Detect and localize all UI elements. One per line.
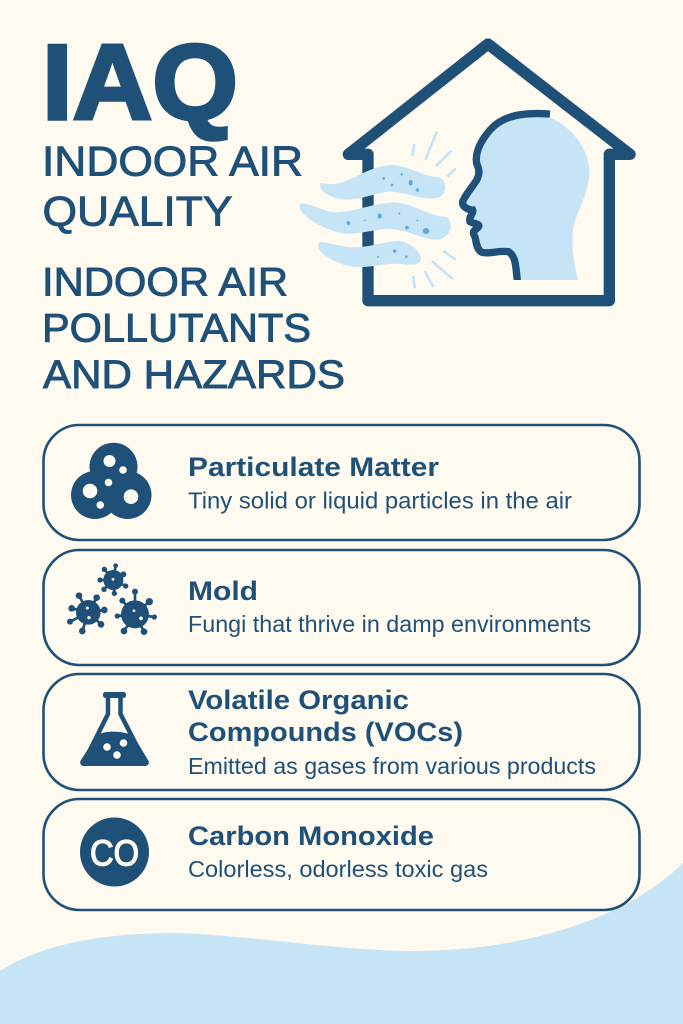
icon: particles [71, 443, 152, 519]
card: particulate matter [44, 425, 640, 540]
heading: indoor air pollutants and hazards: POLLUTANTS [42, 307, 311, 351]
background wave [0, 863, 683, 1024]
house outline [348, 44, 630, 301]
polluted air streams [299, 165, 451, 267]
head fill [465, 115, 589, 280]
heading: indoor air pollutants and hazards: INDOOR AIR [42, 261, 288, 305]
heading: indoor air pollutants and hazards [42, 261, 345, 397]
card: particulate matter: Tiny solid or liquid particles in the air [188, 487, 572, 513]
head profile line [463, 114, 550, 287]
text: volatile organic compounds: Volatile Organic [188, 685, 409, 715]
card: volatile organic compounds: Emitted as gases from various products [188, 753, 596, 779]
icon: mold spores [67, 563, 157, 635]
air rays [412, 131, 456, 288]
text: particulate matter: Particulate Matter [188, 452, 439, 482]
heading: indoor air pollutants and hazards: AND HAZARDS [43, 353, 345, 397]
heading: indoor air quality: INDOOR AIR [42, 138, 303, 185]
icon: CO badge: CO [90, 832, 139, 874]
card: mold: Fungi that thrive in damp environments [188, 611, 591, 637]
card: mold [44, 550, 640, 665]
card: carbon monoxide: Colorless, odorless toxic gas [188, 856, 488, 882]
card: volatile organic compounds: Compounds (VOCs) [188, 717, 463, 747]
pollutant specks [346, 173, 429, 258]
heading: indoor air quality [42, 138, 303, 235]
card: volatile organic compounds [44, 674, 640, 790]
text: carbon monoxide: Carbon Monoxide [188, 821, 434, 851]
card: carbon monoxide [44, 799, 640, 910]
illustration: house with head and polluted air [299, 44, 630, 301]
icon: flask [80, 692, 149, 766]
heading: indoor air quality: QUALITY [42, 188, 232, 235]
title: IAQ: IAQ [42, 22, 238, 142]
text: mold: Mold [188, 576, 258, 606]
icon: CO badge [80, 818, 149, 886]
